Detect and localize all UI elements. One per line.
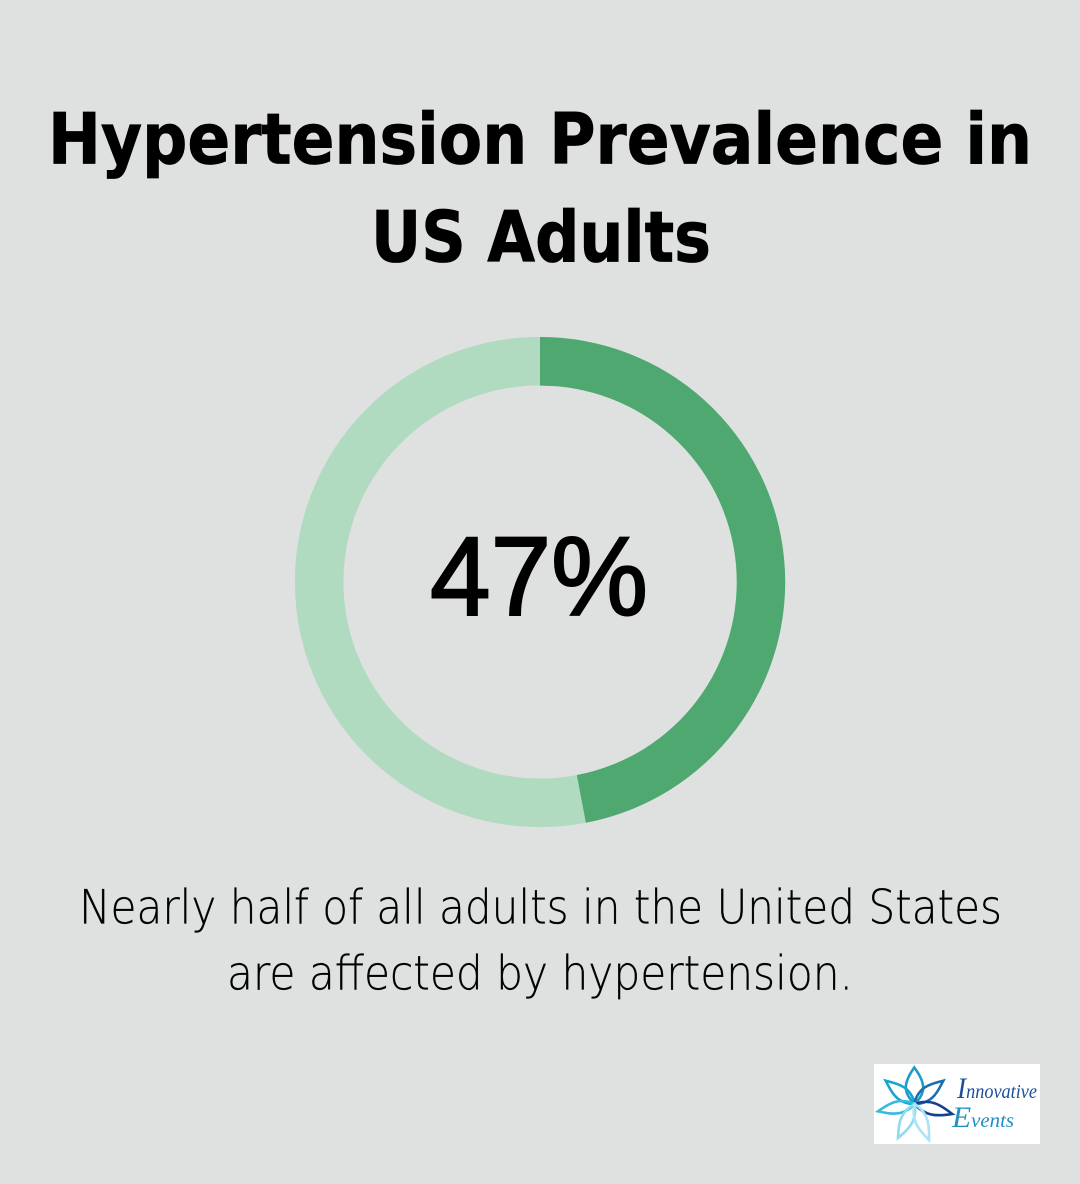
title — [48, 99, 1032, 279]
logo background — [874, 1064, 1040, 1144]
logo wordmark: Innovative — [956, 1072, 1037, 1105]
donut value arc — [540, 337, 785, 823]
donut track — [319, 361, 761, 803]
donut chart: 47% — [319, 337, 785, 823]
donut value label: 47% — [430, 514, 648, 639]
logo wordmark: Events — [951, 1101, 1014, 1134]
description text: are affected by hypertension. — [227, 946, 853, 1001]
logo: Innovative Events — [874, 1064, 1040, 1144]
description text: Nearly half of all adults in the United States — [79, 880, 1002, 935]
logo wordmark — [951, 1072, 1037, 1134]
description text — [79, 880, 1002, 1001]
icon: lotus flower — [878, 1068, 952, 1140]
title: US Adults — [371, 197, 711, 279]
